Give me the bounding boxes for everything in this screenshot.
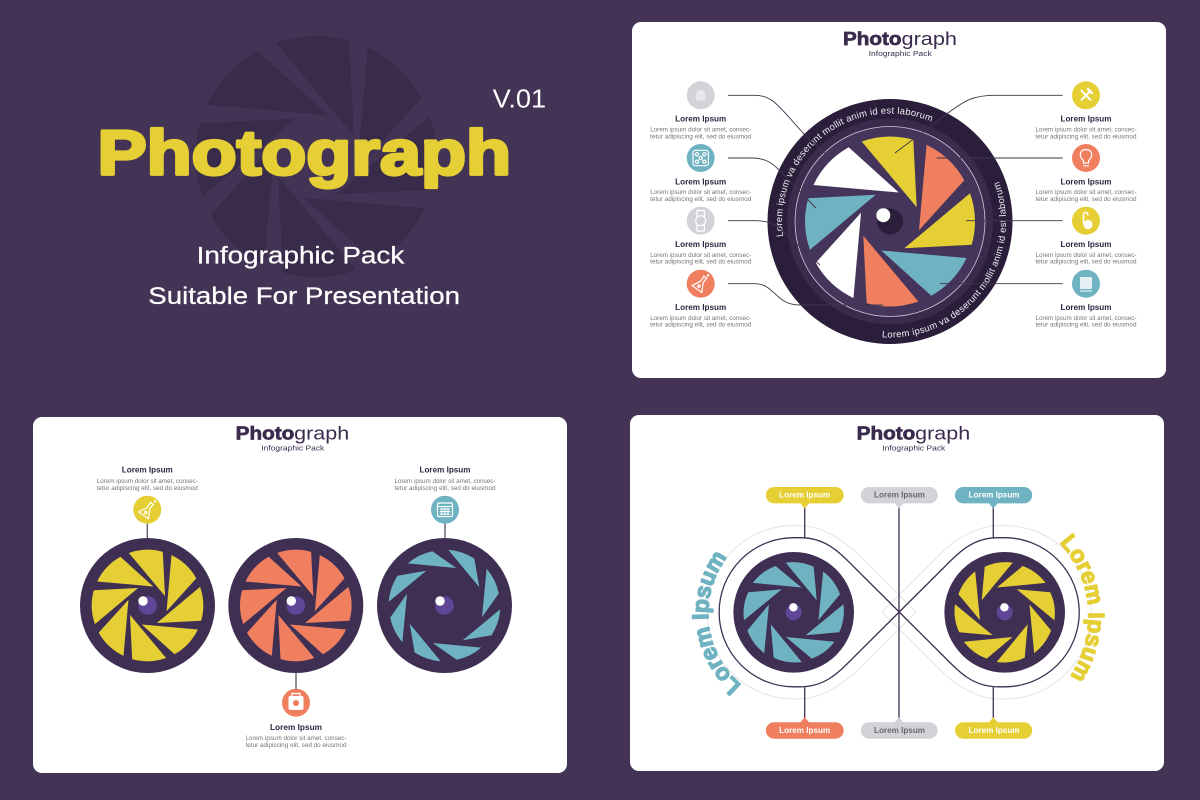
heading: graph xyxy=(902,28,957,49)
main title: Photograph xyxy=(98,118,511,188)
pill: orange bottom: Lorem Ipsum xyxy=(779,726,830,735)
background aperture watermark xyxy=(195,36,437,277)
heading: Infographic Pack xyxy=(261,444,325,453)
item: flask callout: Lorem Ipsum xyxy=(122,466,173,475)
item: flask: Lorem ipsum dolor sit amet, consec- xyxy=(650,315,751,322)
item: flask xyxy=(650,270,752,329)
pill: orange bottom xyxy=(766,717,844,739)
item: book xyxy=(1036,270,1137,329)
item: bell: Lorem Ipsum xyxy=(675,115,726,124)
lens: yellow xyxy=(944,552,1065,673)
item: calendar callout xyxy=(394,466,496,524)
item: watch xyxy=(650,207,752,266)
item: flask callout xyxy=(97,466,198,524)
lens: Lorem ipsum va deserunt mollit anim id est laborum xyxy=(776,107,932,236)
item: calendar callout: tetur adipiscing elit, sed do eiusmod xyxy=(394,485,496,492)
pill: yellow top: Lorem Ipsum xyxy=(779,490,830,499)
heading: Infographic Pack xyxy=(869,49,932,58)
item: bell: Lorem ipsum dolor sit amet, consec- xyxy=(650,126,751,134)
item: dice: tetur adipiscing elit, sed do eiusmod xyxy=(650,196,752,203)
item: open lock: tetur adipiscing elit, sed do eiusmod xyxy=(1036,259,1137,266)
item: tools: tetur adipiscing elit, sed do eiusmod xyxy=(1036,133,1137,140)
heading xyxy=(843,28,957,58)
infinity line xyxy=(719,538,1079,687)
heading: Infographic Pack xyxy=(882,444,946,453)
item: flask callout: tetur adipiscing elit, sed do eiusmod xyxy=(97,485,198,492)
subtitle: infographic pack: Infographic Pack xyxy=(197,242,405,269)
curved label: teal: Lorem Ipsum xyxy=(692,552,742,696)
item: flask callout: Lorem ipsum dolor sit amet, consec- xyxy=(97,478,198,485)
pill: yellow bottom: Lorem Ipsum xyxy=(968,726,1020,735)
item: tools: Lorem ipsum dolor sit amet, consec- xyxy=(1036,126,1136,134)
subtitle: suitable for presentation: Suitable For Presentation xyxy=(148,283,460,310)
pill: grey bottom: Lorem Ipsum xyxy=(874,726,925,735)
heading: graph xyxy=(294,422,349,443)
vertical connectors xyxy=(805,506,993,718)
light outer infinity outline xyxy=(707,526,1091,699)
heading: Photo xyxy=(857,422,915,443)
pill: yellow bottom xyxy=(955,717,1032,739)
item: camera callout: Lorem Ipsum xyxy=(270,723,322,732)
item: book: tetur adipiscing elit, sed do eiusmod xyxy=(1036,322,1137,329)
item: light bulb: tetur adipiscing elit, sed do eiusmod xyxy=(1036,196,1137,203)
lens: teal xyxy=(733,552,854,673)
connector stems xyxy=(147,523,445,689)
item: camera callout xyxy=(246,689,347,749)
lens: yellow xyxy=(80,538,215,673)
panel: large lens xyxy=(632,22,1166,378)
heading: graph xyxy=(915,422,970,443)
item: flask: tetur adipiscing elit, sed do eiusmod xyxy=(650,322,752,329)
item: flask: Lorem Ipsum xyxy=(675,303,726,312)
item: bell: tetur adipiscing elit, sed do eiusmod xyxy=(650,133,752,140)
item: light bulb xyxy=(1036,144,1137,203)
item: watch: tetur adipiscing elit, sed do eiusmod xyxy=(650,259,752,266)
lens xyxy=(768,99,1012,344)
item: dice xyxy=(650,144,752,203)
version label: V.01 xyxy=(493,83,546,113)
pill: teal top: Lorem Ipsum xyxy=(968,490,1020,499)
item: dice: Lorem Ipsum xyxy=(675,177,726,186)
panel: three lenses xyxy=(33,417,567,773)
item: light bulb: Lorem ipsum dolor sit amet, consec- xyxy=(1036,189,1136,196)
panel: infinity xyxy=(630,415,1164,771)
lens: teal xyxy=(377,538,512,673)
pill: grey top xyxy=(861,487,938,508)
item: camera callout: Lorem ipsum dolor sit amet, consec- xyxy=(246,735,346,742)
pill: yellow top xyxy=(766,487,844,508)
item: calendar callout: Lorem ipsum dolor sit amet, consec- xyxy=(394,478,496,485)
item: dice: Lorem ipsum dolor sit amet, consec- xyxy=(650,189,751,196)
item: calendar callout: Lorem Ipsum xyxy=(420,466,471,475)
pill: grey top: Lorem Ipsum xyxy=(874,490,925,499)
item: watch: Lorem ipsum dolor sit amet, consec- xyxy=(650,252,751,259)
item: camera callout: tetur adipiscing elit, sed do eiusmod xyxy=(246,742,347,749)
item: light bulb: Lorem Ipsum xyxy=(1060,177,1112,186)
pill: teal top xyxy=(955,487,1032,508)
heading xyxy=(236,422,349,453)
pill: grey bottom xyxy=(861,717,938,739)
item: book: Lorem Ipsum xyxy=(1060,303,1112,312)
lens: orange xyxy=(228,538,363,673)
connector lines xyxy=(728,95,1063,305)
heading: Photo xyxy=(843,28,902,49)
curved label: yellow: Lorem Ipsum xyxy=(1060,532,1105,681)
heading xyxy=(857,422,970,453)
item: book: Lorem ipsum dolor sit amet, consec- xyxy=(1036,315,1136,322)
heading: Photo xyxy=(236,422,294,443)
item: open lock xyxy=(1036,207,1137,266)
item: open lock: Lorem Ipsum xyxy=(1060,240,1112,249)
item: bell xyxy=(650,81,752,140)
item: tools xyxy=(1036,81,1137,140)
item: tools: Lorem Ipsum xyxy=(1060,115,1112,124)
lens: Lorem ipsum va deserunt mollit anim id est laborum xyxy=(882,182,1006,338)
item: open lock: Lorem ipsum dolor sit amet, consec- xyxy=(1036,252,1136,259)
item: watch: Lorem Ipsum xyxy=(675,240,726,249)
